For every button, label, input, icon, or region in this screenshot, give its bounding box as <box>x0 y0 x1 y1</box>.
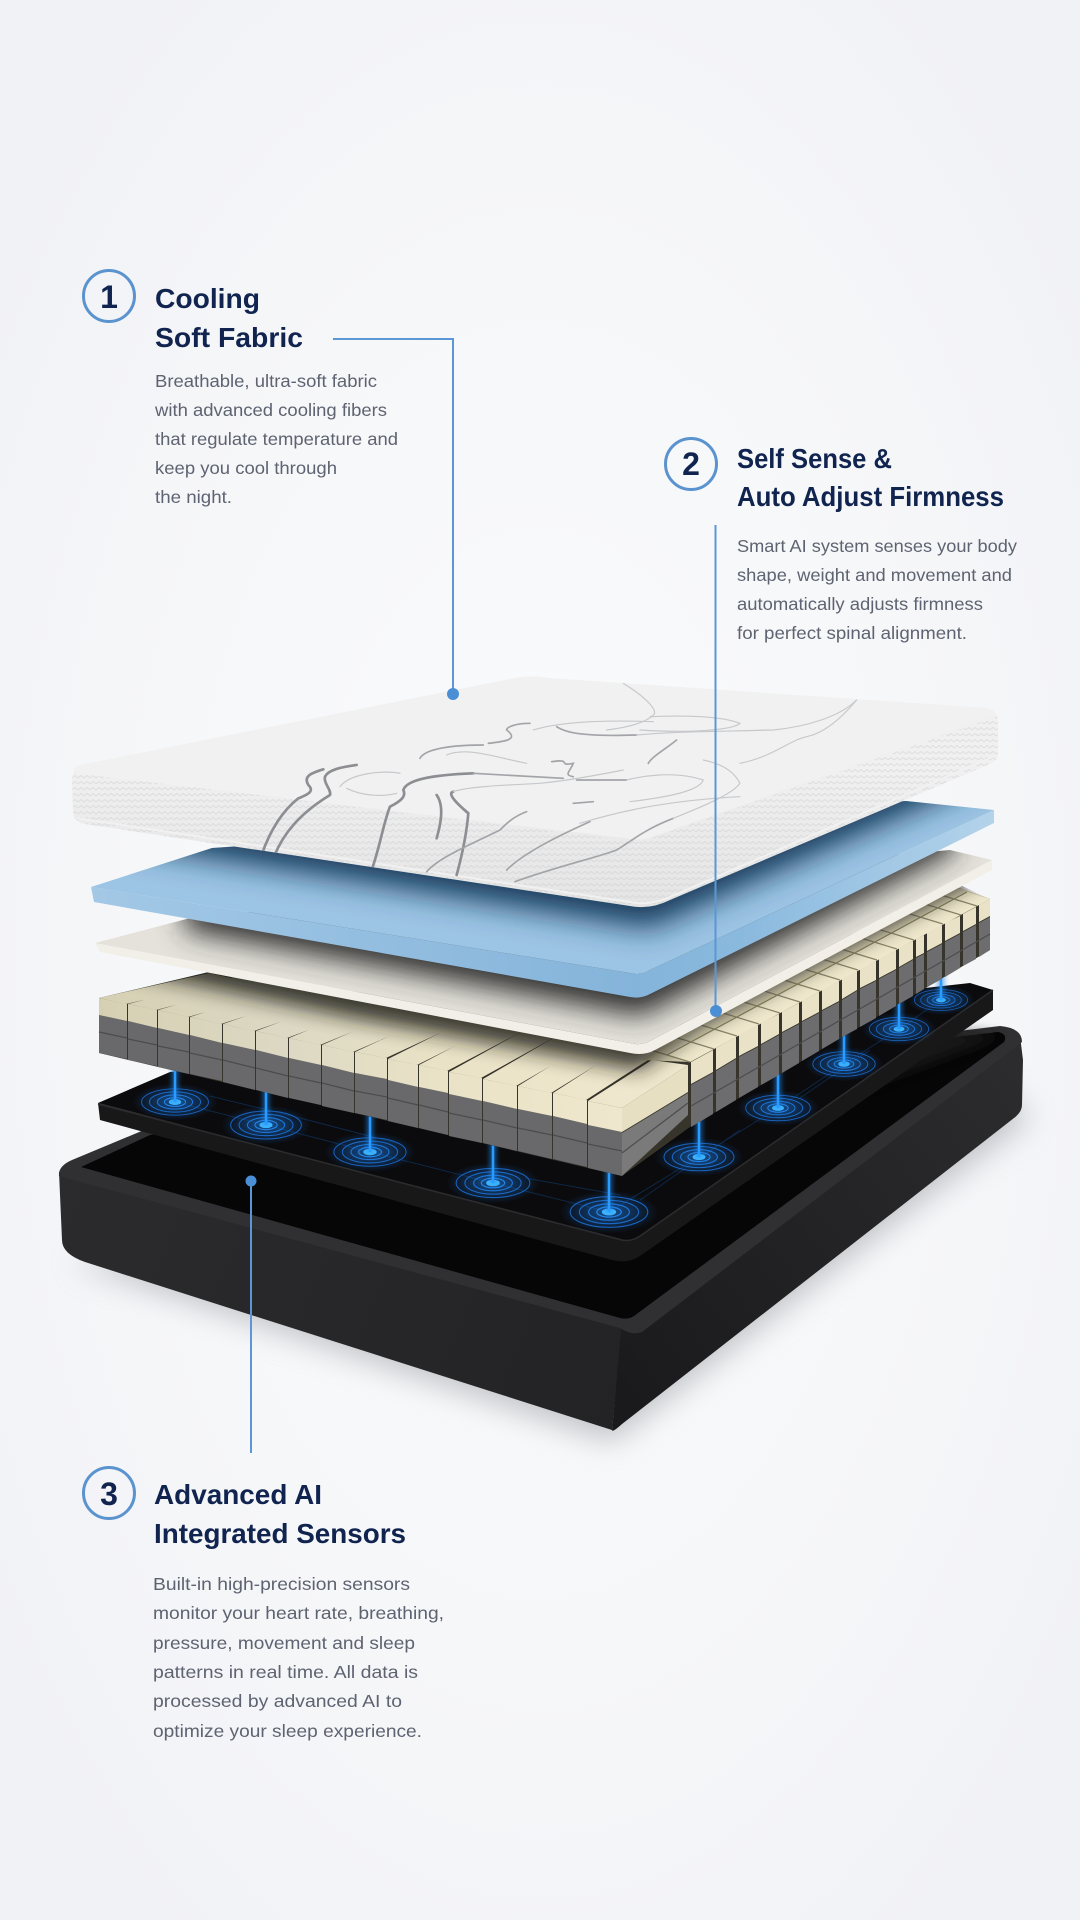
heading 2: Auto Adjust Firmness <box>737 481 1004 512</box>
description 1: with advanced cooling fibers <box>154 400 387 420</box>
heading 1 <box>155 283 303 353</box>
description 3: pressure, movement and sleep <box>153 1633 415 1653</box>
badge 2: 2 <box>682 446 700 482</box>
mattress layer illustration <box>59 676 1023 1431</box>
badge 1 <box>84 270 134 322</box>
connector line 3 <box>246 1176 256 1453</box>
callout 1: cooling soft fabric <box>84 270 459 700</box>
description 2: shape, weight and movement and <box>737 565 1012 585</box>
badge 1: 1 <box>100 279 118 315</box>
badge 3: 3 <box>100 1476 118 1512</box>
heading 2: Self Sense & <box>737 443 892 474</box>
circuit traces <box>175 1000 941 1212</box>
heading 2 <box>737 443 1004 512</box>
description 1: keep you cool through <box>155 458 337 478</box>
layer: blue cooling foam <box>91 801 994 998</box>
heading 3 <box>154 1479 406 1549</box>
description 3: monitor your heart rate, breathing, <box>153 1603 444 1623</box>
badge 2 <box>666 438 716 490</box>
callout 3: advanced AI integrated sensors <box>84 1176 444 1741</box>
description 3: patterns in real time. All data is <box>153 1662 418 1682</box>
description 3: processed by advanced AI to <box>153 1691 402 1711</box>
layer: cooling soft fabric cover <box>72 676 998 907</box>
heading 3: Integrated Sensors <box>154 1518 406 1549</box>
description 3 <box>153 1574 444 1741</box>
description 3: optimize your sleep experience. <box>153 1721 422 1741</box>
description 1: that regulate temperature and <box>155 429 398 449</box>
description 1 <box>154 371 398 507</box>
description 3: Built-in high-precision sensors <box>153 1574 410 1594</box>
shadow cast on blocks <box>140 886 982 1084</box>
block tops: right row <box>640 888 990 1062</box>
description 2 <box>737 536 1017 643</box>
connector line 2 <box>710 525 722 1017</box>
heading 3: Advanced AI <box>154 1479 322 1510</box>
description 1: Breathable, ultra-soft fabric <box>155 371 377 391</box>
block cream faces <box>99 998 622 1132</box>
block seams <box>99 934 990 1153</box>
description 2: Smart AI system senses your body <box>737 536 1017 556</box>
heading 1: Cooling <box>155 283 260 314</box>
layer: base frame <box>59 1020 1023 1431</box>
description 2: automatically adjusts firmness <box>737 594 983 614</box>
callout 2: self sense and auto adjust firmness <box>666 438 1017 1017</box>
layer: foam support blocks <box>98 886 990 1176</box>
heading 1: Soft Fabric <box>155 322 303 353</box>
fabric wave pattern <box>262 683 857 882</box>
floor shadow <box>70 1090 1030 1442</box>
block gray faces <box>99 1015 622 1176</box>
layer: sensor board <box>98 983 993 1261</box>
description 1: the night. <box>155 487 232 507</box>
sensors with light beams <box>133 945 975 1233</box>
description 2: for perfect spinal alignment. <box>737 623 967 643</box>
layer: cream comfort sheet <box>95 850 992 1054</box>
badge 3 <box>84 1468 134 1518</box>
connector line 1 <box>333 339 459 700</box>
block tops: left row <box>99 973 696 1108</box>
